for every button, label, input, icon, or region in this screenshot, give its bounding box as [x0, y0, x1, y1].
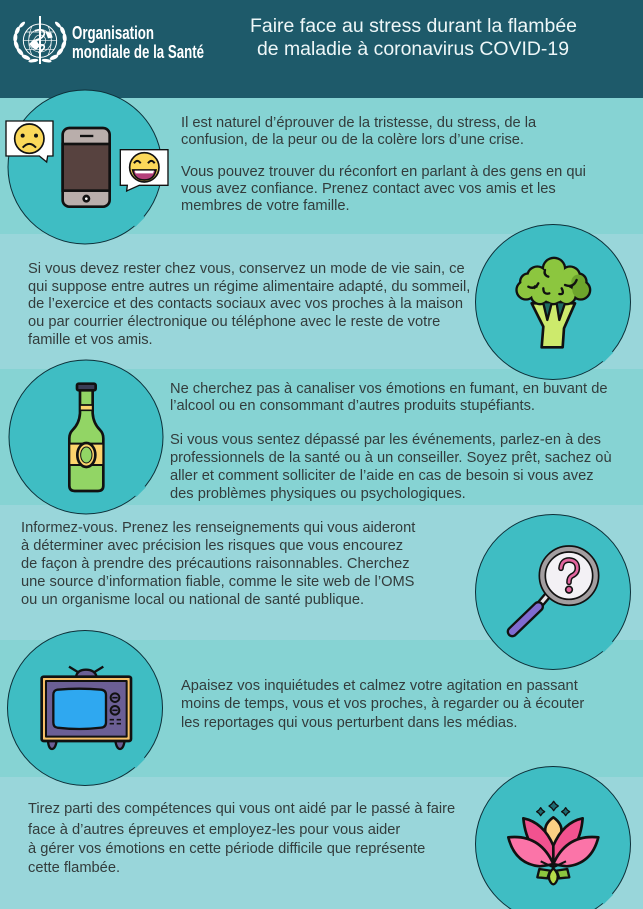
text: panel 5: Apaisez vos inquiétudes et calmez votre agitation en passant: [181, 678, 578, 694]
text: panel 1: Vous pouvez trouver du réconfort en parlant à des gens en qui: [181, 164, 586, 180]
text: panel 2: qui suppose entre autres un régime alimentaire adapté, du sommeil,: [28, 279, 470, 295]
text: panel 4: [21, 520, 415, 608]
organisation name: [72, 23, 204, 62]
icon: lotus: [508, 801, 598, 884]
title: [250, 16, 577, 60]
WHO logo: [13, 16, 204, 64]
text: panel 6: face à d’autres épreuves et employez-les pour vous aider: [28, 822, 400, 838]
text: panel 3: l’alcool ou en consommant d’autres produits stupéfiants.: [170, 398, 535, 414]
icon: happy face bubble: [120, 150, 168, 191]
text: panel 4: à déterminer avec précision les risques que vous encourez: [21, 538, 403, 554]
text: panel 1: membres de votre famille.: [181, 198, 350, 214]
text: panel 4: une source d’information fiable, comme le site web de l’OMS: [21, 574, 415, 590]
icon: television: [42, 667, 131, 749]
text: panel 6: à gérer vos émotions en cette période difficile que représente: [28, 841, 425, 857]
circle: panel 1: [8, 90, 162, 244]
text: panel 4: de façon à prendre des précautions raisonnables. Cherchez: [21, 556, 410, 572]
circle: panel 3: [9, 360, 163, 514]
text: panel 5: [181, 678, 584, 731]
text: panel 6: [28, 801, 455, 876]
text: panel 6: Tirez parti des compétences qui vous ont aidé par le passé à faire: [28, 801, 455, 817]
icon: bottle: [69, 384, 103, 491]
text: panel 3: professionnels de la santé ou à un conseiller. Soyez prêt, sachez où: [170, 450, 612, 466]
text: panel 3: Si vous vous sentez dépassé par les événements, parlez-en à des: [170, 432, 601, 448]
title: Faire face au stress durant la flambée: [250, 16, 577, 37]
organisation name: mondiale de la Santé: [72, 42, 204, 62]
text: panel 1: vous avez confiance. Prenez contact avec vos amis et les: [181, 181, 556, 197]
circle: panel 2: [476, 224, 630, 380]
icon: broccoli: [515, 257, 591, 347]
text: panel 2: Si vous devez rester chez vous, conservez un mode de vie sain, ce: [28, 261, 465, 277]
text: panel 1: confusion, de la peur ou de la colère lors d’une crise.: [181, 132, 524, 148]
text: panel 1: Il est naturel d’éprouver de la tristesse, du stress, de la: [181, 115, 537, 131]
icon: phone with emoji bubbles: [6, 121, 168, 207]
circle: panel 5: [8, 630, 162, 786]
text: panel 3: des problèmes physiques ou psychologiques.: [170, 486, 466, 502]
text: panel 2: [28, 261, 470, 348]
text: panel 5: moins de temps, vous et vos proches, à regarder ou à écouter: [181, 696, 584, 712]
icon: WHO emblem: [13, 16, 67, 64]
icon: magnifying glass: [512, 546, 599, 632]
text: panel 4: Informez-vous. Prenez les renseignements qui vous aideront: [21, 520, 415, 536]
text: panel 2: famille et vos amis.: [28, 332, 153, 348]
text: panel 3: Ne cherchez pas à canaliser vos émotions en fumant, en buvant de: [170, 381, 608, 397]
text: panel 2: de l’exercice et des contacts sociaux avec vos proches à la maison: [28, 296, 463, 312]
organisation name: Organisation: [72, 23, 154, 43]
circle: panel 4: [476, 514, 630, 670]
icon: sad face bubble: [6, 121, 53, 162]
text: panel 4: ou un organisme local ou national de santé publique.: [21, 592, 364, 608]
header band: [0, 0, 643, 98]
icon: smartphone: [63, 128, 110, 207]
text: panel 3: aller et comment solliciter de l’aide en cas de besoin si vous avez: [170, 468, 594, 484]
text: panel 2: ou par courrier électronique ou téléphone avec le reste de votre: [28, 314, 440, 330]
text: panel 1: [181, 115, 586, 214]
text: panel 3: [170, 381, 612, 502]
circle: panel 6: [476, 766, 630, 909]
text: panel 5: les reportages qui vous perturbent dans les médias.: [181, 715, 517, 731]
text: panel 6: cette flambée.: [28, 860, 120, 876]
title: de maladie à coronavirus COVID-19: [257, 39, 569, 60]
